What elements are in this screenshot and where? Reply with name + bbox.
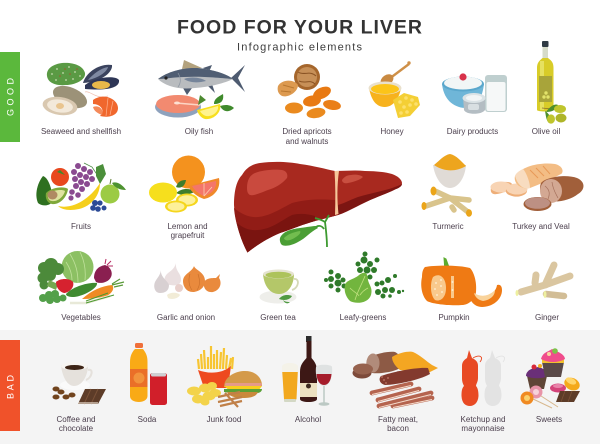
label: Green tea — [260, 313, 296, 322]
item: pumpkin — [421, 258, 502, 322]
icon: green tea cup — [260, 270, 298, 304]
icon: turmeric bowl and roots — [422, 154, 472, 217]
item: honey — [368, 61, 420, 136]
item: alcohol — [282, 336, 332, 424]
label: Dried apricots — [282, 127, 332, 136]
icon: ketchup and mayo bottles — [462, 350, 505, 406]
icon: coffee cup, beans, chocolate — [52, 362, 106, 404]
tab: bad — [0, 340, 20, 431]
label: Dairy products — [447, 127, 498, 136]
label line 2: chocolate — [59, 424, 94, 433]
label line 2: mayonnaise — [461, 424, 505, 433]
item: garlic and onion — [154, 263, 221, 322]
item: dairy products — [442, 73, 507, 136]
label: Honey — [380, 127, 404, 136]
label: Fatty meat, — [378, 415, 418, 424]
label: Vegetables — [61, 313, 101, 322]
icon: honey bowl, dipper, honeycomb — [368, 61, 420, 118]
icon: leafy greens — [324, 252, 404, 303]
label: Ginger — [535, 313, 559, 322]
tab: good: GOOD — [5, 78, 15, 116]
subtitle: Infographic elements — [237, 42, 362, 54]
item: coffee and chocolate — [52, 362, 106, 433]
label: Olive oil — [532, 127, 560, 136]
label line 2: grapefruit — [171, 231, 205, 240]
label: Pumpkin — [438, 313, 470, 322]
illustration: liver — [234, 162, 402, 252]
item: olive oil — [532, 41, 566, 136]
icon: walnut and apricots — [278, 64, 342, 120]
label: Turmeric — [432, 222, 464, 231]
icon: sliced meats — [490, 164, 584, 211]
tab: bad: BAD — [5, 374, 15, 399]
icon: beer glass, wine bottle, wine glass — [282, 336, 332, 406]
icon: ginger root — [516, 265, 570, 298]
label: Fruits — [71, 222, 91, 231]
item: soda — [130, 343, 167, 424]
label: Soda — [138, 415, 157, 424]
item: seaweed and shellfish — [41, 63, 121, 136]
item: ginger — [516, 265, 570, 322]
label: Seaweed and shellfish — [41, 127, 121, 136]
icon: garlic bulbs and onions — [154, 263, 221, 299]
item: apricots and walnuts — [278, 64, 342, 146]
item: junk food — [187, 346, 262, 424]
icon: meats, sausage, bacon — [352, 352, 438, 408]
item: green tea — [260, 270, 298, 322]
label: Sweets — [536, 415, 562, 424]
item: leafy greens — [324, 252, 404, 322]
tab: good — [0, 52, 20, 142]
item: vegetables — [38, 251, 124, 322]
title: FOOD FOR YOUR LIVER — [177, 16, 422, 38]
icon: olive oil bottle and olives — [537, 41, 566, 124]
icon: tuna and salmon with lemon — [155, 60, 245, 119]
icon: citrus group — [149, 156, 219, 212]
icon: vegetable group — [38, 251, 124, 304]
label: Turkey and Veal — [512, 222, 570, 231]
item: turmeric — [422, 154, 472, 231]
label: Ketchup and — [461, 415, 505, 424]
item: lemon and grapefruit — [149, 156, 219, 240]
label: Oily fish — [185, 127, 213, 136]
item: fatty meat and bacon — [352, 352, 438, 433]
item: ketchup and mayonnaise — [461, 350, 505, 433]
label: Junk food — [207, 415, 241, 424]
label: Lemon and — [167, 222, 208, 231]
label line 2: and walnuts — [286, 137, 328, 146]
icon: dairy bowl, milk glass, cup — [442, 73, 507, 114]
label line 2: bacon — [387, 424, 409, 433]
icon: pumpkin and wedge — [421, 258, 502, 307]
label: Alcohol — [295, 415, 321, 424]
item: sweets — [520, 348, 582, 424]
icon: cupcakes, candies, lollipop, chocolate — [520, 348, 582, 408]
icon: soda bottle and can — [130, 343, 167, 405]
label: Leafy-greens — [340, 313, 386, 322]
label: Garlic and onion — [157, 313, 215, 322]
item: oily fish — [155, 60, 245, 136]
item: fruits — [36, 163, 126, 231]
label: Coffee and — [56, 415, 96, 424]
gallbladder and duct — [280, 215, 329, 247]
icon: seaweed and shellfish — [41, 63, 119, 117]
item: turkey and veal — [490, 164, 584, 231]
panel: bad background — [0, 330, 600, 444]
icon: fries, burger, chips — [187, 346, 262, 407]
icon: fruit group — [36, 163, 126, 212]
